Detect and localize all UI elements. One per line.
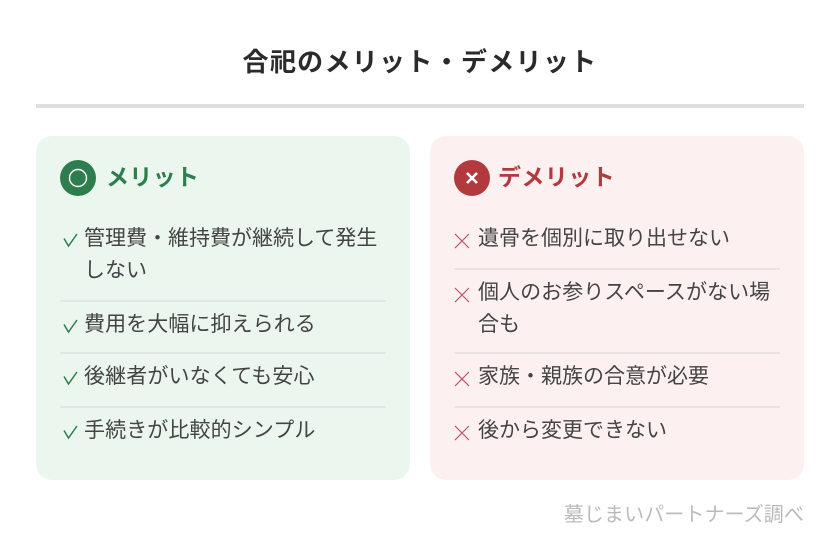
item 4: 後から変更できない [478,419,667,442]
title: 合祀のメリット・デメリット [243,47,597,77]
item 1 [63,227,377,282]
item 2 [454,281,770,336]
item 3: 後継者がいなくても安心 [84,365,315,388]
heading: merits: メリット [106,164,199,190]
icon: cross circle [454,160,490,196]
item 1: 管理費・維持費が継続して発生 [84,227,377,250]
panel: merits [36,136,410,480]
panel: demerits [430,136,804,480]
icon: circle [60,160,96,196]
item 3: 家族・親族の合意が必要 [478,365,709,388]
item 1: しない [84,259,147,282]
item 4: 手続きが比較的シンプル [84,419,315,442]
title rule [36,104,804,108]
source note: 墓じまいパートナーズ調べ [564,504,804,526]
item 1: 遺骨を個別に取り出せない [478,227,730,250]
item 2: 費用を大幅に抑えられる [84,313,316,336]
item 2: 合も [478,313,520,336]
item 2: 個人のお参りスペースがない場 [478,281,770,304]
heading: demerits: デメリット [498,164,615,190]
